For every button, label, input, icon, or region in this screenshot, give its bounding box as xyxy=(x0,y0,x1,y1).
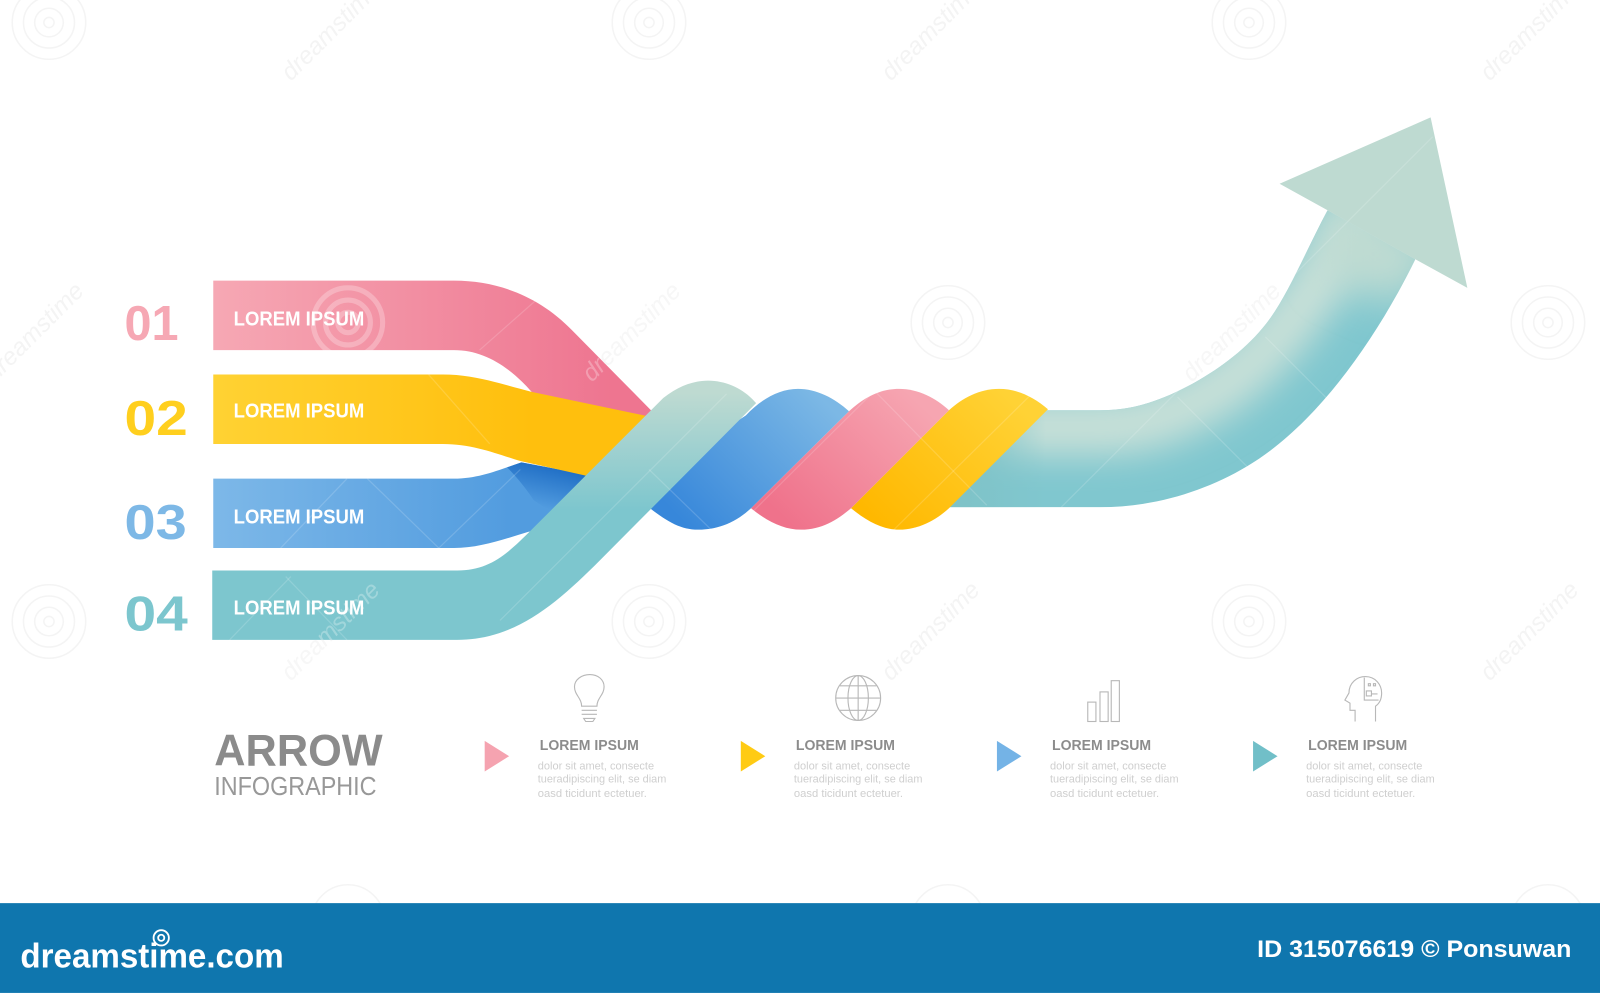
item 3 text: tueradipiscing elit, se diam xyxy=(1050,774,1179,786)
marker yellow xyxy=(741,741,765,772)
twist lobe pink xyxy=(751,389,949,530)
band 02 yellow xyxy=(213,375,663,482)
item 1 text: LOREM IPSUM xyxy=(540,738,639,754)
marker teal xyxy=(1253,741,1278,772)
watermark: dreamstime xyxy=(1475,576,1584,686)
twist lobe yellow xyxy=(851,389,1048,530)
band labels xyxy=(234,309,364,619)
item 2 text xyxy=(794,738,923,800)
watermark overlay on shapes: dreamstime xyxy=(276,576,385,686)
item 4 xyxy=(1253,738,1435,800)
watermark: dreamstime xyxy=(1177,277,1286,387)
title: INFOGRAPHIC xyxy=(214,773,377,801)
arrow head xyxy=(1280,117,1467,288)
watermark overlay on shapes: dreamstime xyxy=(1177,277,1286,387)
item 3 xyxy=(997,738,1179,800)
arrow body xyxy=(950,210,1416,508)
item 3 text: dolor sit amet, consecte xyxy=(1050,760,1166,772)
item 1 text: tueradipiscing elit, se diam xyxy=(538,774,666,786)
twist lobe blue xyxy=(633,389,849,530)
step numbers: 04 xyxy=(124,588,188,642)
big arrow xyxy=(939,117,1467,520)
icon: head with circuit xyxy=(1345,677,1382,722)
watermark overlay on shapes: dreamstime xyxy=(577,277,686,387)
icon: light bulb xyxy=(574,675,604,722)
marker blue xyxy=(997,741,1021,772)
item 3 text: LOREM IPSUM xyxy=(1052,738,1151,754)
title xyxy=(214,724,383,801)
item 4 text: dolor sit amet, consecte xyxy=(1306,760,1422,772)
item 2 xyxy=(741,738,923,800)
band labels: LOREM IPSUM xyxy=(234,507,364,529)
watermark: dreamstime xyxy=(276,576,385,686)
item 2 text: dolor sit amet, consecte xyxy=(794,760,910,772)
item 1 text: dolor sit amet, consecte xyxy=(538,760,654,772)
icon: globe xyxy=(836,676,881,720)
item 2 text: oasd ticidunt ectetuer. xyxy=(794,788,903,800)
item 2 text: tueradipiscing elit, se diam xyxy=(794,774,923,786)
item 1 xyxy=(485,738,666,800)
watermark overlay on shapes xyxy=(276,277,1286,686)
band 01 pink xyxy=(213,281,653,449)
item 4 text: tueradipiscing elit, se diam xyxy=(1306,774,1435,786)
title: ARROW xyxy=(214,724,383,775)
footer credit: ID 315076619 © Ponsuwan xyxy=(1257,936,1571,963)
footer bar xyxy=(0,903,1600,993)
marker pink xyxy=(485,741,509,772)
step numbers: 03 xyxy=(124,496,187,550)
band labels: LOREM IPSUM xyxy=(234,309,364,331)
band 03 shadow xyxy=(507,462,602,515)
watermark: dreamstime xyxy=(577,277,686,387)
item 3 text: oasd ticidunt ectetuer. xyxy=(1050,788,1159,800)
item 1 text xyxy=(538,738,666,800)
band labels: LOREM IPSUM xyxy=(234,400,364,422)
step numbers: 01 xyxy=(124,297,179,351)
band labels: LOREM IPSUM xyxy=(234,597,364,619)
item 2 text: LOREM IPSUM xyxy=(796,738,895,754)
item 1 text: oasd ticidunt ectetuer. xyxy=(538,788,647,800)
item 4 text: LOREM IPSUM xyxy=(1308,738,1407,754)
item 3 text xyxy=(1050,738,1179,800)
footer logo: dreamstime.com xyxy=(20,937,284,975)
icon: bar chart xyxy=(1088,681,1119,722)
step numbers: 02 xyxy=(124,392,188,446)
item 4 text xyxy=(1306,738,1435,800)
step numbers xyxy=(124,297,188,642)
watermark spiral on pink band xyxy=(313,288,383,357)
band 03 blue xyxy=(213,462,602,548)
watermark: dreamstime xyxy=(876,576,985,686)
band 04 teal strand xyxy=(212,381,756,640)
item 4 text: oasd ticidunt ectetuer. xyxy=(1306,788,1415,800)
watermark lines over shapes xyxy=(230,137,1433,640)
band 03 body xyxy=(213,462,602,548)
